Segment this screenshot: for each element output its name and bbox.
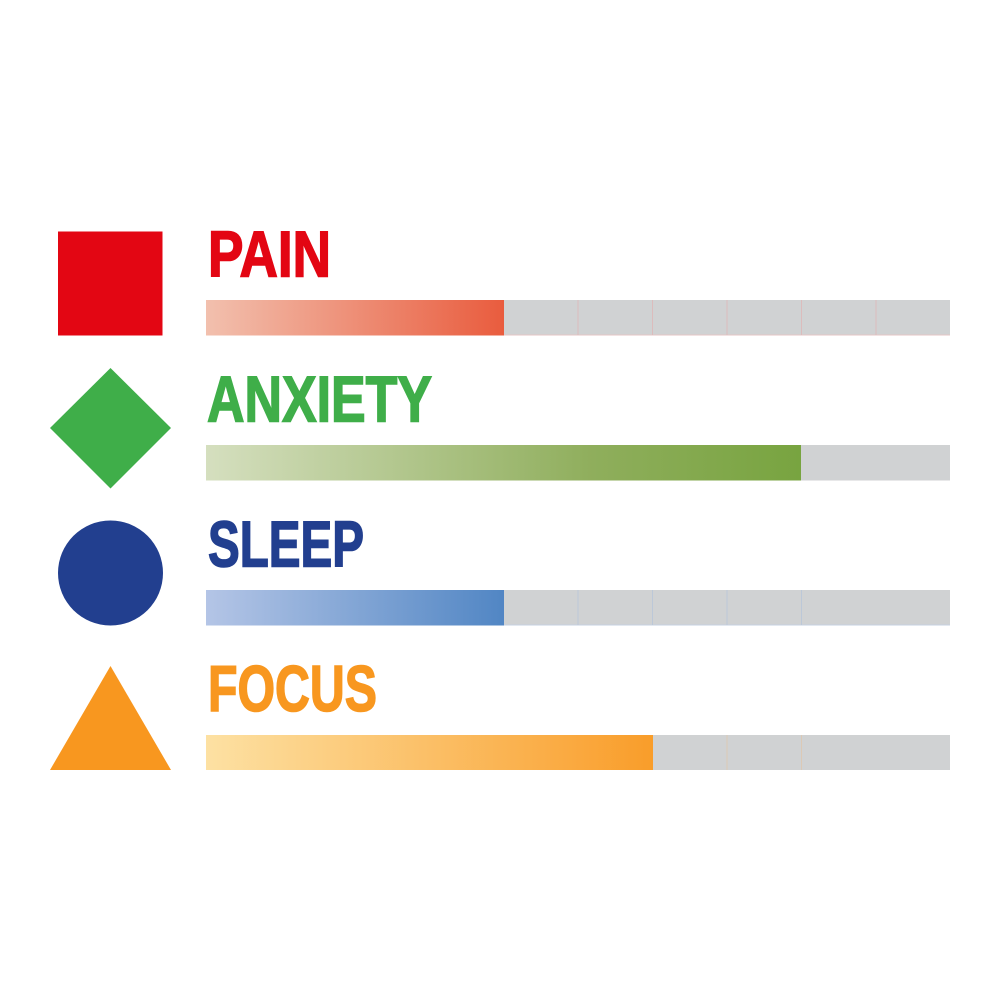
icon: orange triangle: [50, 666, 171, 770]
heading: ANXIETY: ANXIETY: [207, 362, 432, 436]
bar: focus level: [206, 735, 950, 770]
row: pain: [58, 218, 950, 336]
icon: blue circle: [58, 520, 163, 626]
bar: sleep level: [206, 590, 950, 626]
bar: anxiety level: [206, 445, 950, 480]
row: focus: [50, 652, 950, 770]
icon: green diamond: [50, 368, 171, 488]
heading: PAIN: PAIN: [208, 218, 331, 290]
bar: pain level: [206, 300, 950, 336]
icon: red square: [58, 232, 162, 336]
row: anxiety: [50, 362, 950, 488]
row: sleep: [58, 508, 950, 626]
heading: FOCUS: FOCUS: [208, 652, 377, 725]
heading: SLEEP: SLEEP: [208, 508, 364, 580]
